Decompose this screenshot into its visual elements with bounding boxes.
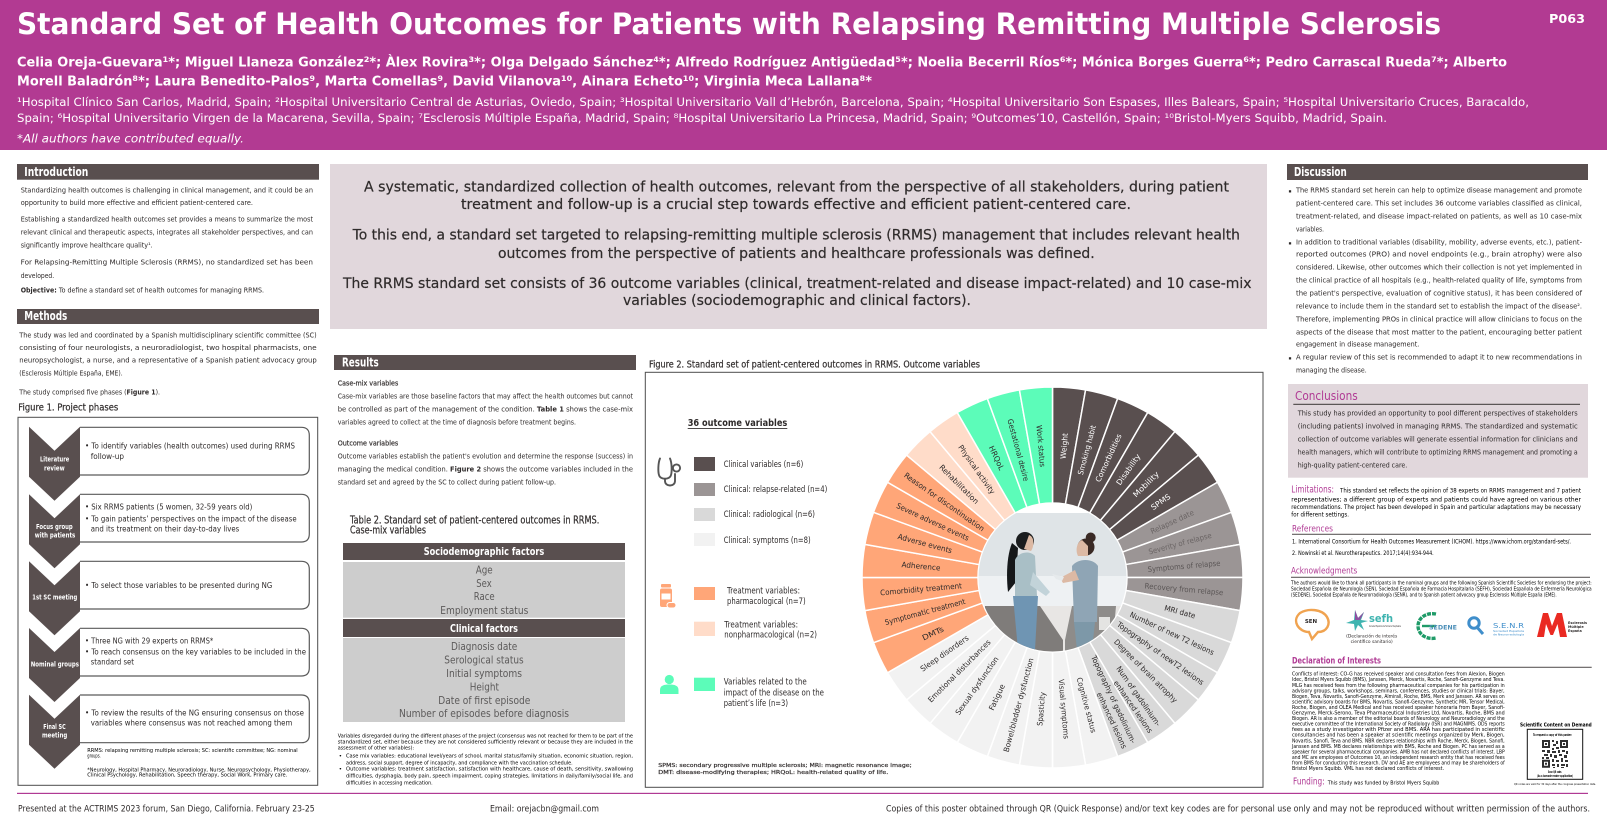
affiliations	[17, 95, 1529, 146]
wheel labels: Comorbidity treatment	[880, 581, 962, 597]
legend: clinical variables: Clinical: symptoms (n=8)	[724, 536, 811, 546]
limitations	[1291, 485, 1581, 519]
heading: methods: Methods	[24, 309, 67, 323]
wheel labels: Mobility	[1131, 469, 1161, 499]
table footnote: address, social support, degree of incapacity, and compliance with the vaccination schedule.	[346, 760, 573, 766]
phase 2: focus group: • To gain patients’ perspectives on the impact of the disease	[85, 515, 297, 524]
wheel labels: Adverse events	[897, 532, 953, 555]
discussion bullets: treatment-related, and disease impact-related on patients, as well as 10 case-mix	[1296, 212, 1583, 221]
declaration of interests: Janssen and BMS. MB declares relationships with BMS, Roche and Biogen. PC has served as a	[1291, 744, 1505, 750]
wheel labels: DMTs	[921, 625, 945, 642]
table title	[349, 515, 599, 537]
methods text: consisting of four neurologists, a neuroradiologist, two hospital pharmacists, one	[19, 343, 317, 352]
logo: SENR: S.E.N.R	[1493, 622, 1524, 630]
logo: sefh: Sociedad Española de Farmacia Hospitalaria	[1369, 624, 1401, 628]
declaration of interests: Bristol Myers Squibb. VML has not declared conflicts of interest.	[1292, 766, 1444, 772]
logo: sefh: científico sanitario)	[1351, 638, 1393, 645]
declaration of interests: Biogen. AR is also a member of the editorial boards of Neurology and Neuroradiology and the	[1292, 716, 1505, 722]
declaration of interests: Genzyme, Merck-Serono, Teva Pharmaceutical Industries Ltd, Novartis, Roche, BMS and	[1292, 710, 1505, 716]
legend: clinical variables: Clinical: radiological (n=6)	[724, 510, 815, 520]
acknowledgments	[1290, 567, 1592, 598]
declaration of interests	[1291, 656, 1592, 772]
table footnote: Variables disregarded during the different phases of the project (consensus was not reached for them to be part of the	[338, 733, 633, 739]
declaration of interests: Novartis, Sanofi, Teva and BMS. NBR declares relationships with Roche, Merck, Biogen, Sanofi,	[1292, 738, 1505, 744]
panel: methods	[17, 309, 319, 414]
wheel labels: Bowel/bladder dysfunction	[1002, 657, 1036, 753]
case-mix text	[338, 379, 634, 427]
phase 5: final SC meeting	[29, 695, 309, 769]
limitations: for different settings.	[1291, 512, 1349, 519]
declaration of interests: MLG has received fees from the following pharmaceutical companies for his participation in	[1292, 683, 1505, 689]
limitations: Limitations:	[1291, 485, 1334, 496]
funding	[1293, 776, 1440, 787]
wheel labels: Relapse date	[1149, 508, 1196, 536]
discussion bullets: In addition to traditional variables (disability, mobility, adverse events, etc.), patient-	[1296, 237, 1582, 246]
QR code panel: (As a barcode reader application)	[1537, 774, 1573, 778]
wheel labels: Symptoms of relapse	[1147, 559, 1221, 574]
figure 1 notes: *Neurology, Hospital Pharmacy, Neuroradiology, Nurse, Neuropsychology, Physiotherapy,	[87, 767, 311, 773]
heading: introduction: Introduction	[24, 165, 88, 179]
references	[1292, 525, 1591, 557]
wheel labels: Rehabilitation	[937, 463, 981, 506]
methods text: neuropsychologist, a nurse, and a representative of a Spanish patient advocacy group	[19, 356, 317, 365]
heading: results	[334, 355, 636, 370]
wheel labels: Recovery from relapse	[1144, 581, 1224, 597]
logo: SENR: Sociedad Española	[1493, 629, 1524, 633]
figure 1 notes: groups.	[87, 754, 101, 760]
table title: Table 2. Standard set of patient-centered outcomes in RRMS.	[349, 515, 599, 527]
wheel labels: Weight	[1059, 433, 1070, 459]
centre photo: two women talking	[978, 503, 1127, 652]
heading: conclusions: Conclusions	[1295, 388, 1358, 403]
phase 2: focus group	[29, 494, 309, 568]
methods text	[18, 330, 317, 396]
table footnote: Outcome variables: treatment satisfaction, satisfaction with healthcare, cause of death, sensitivity, swallowing	[346, 766, 633, 772]
wheel labels: Gestational desire	[1005, 418, 1031, 482]
table footnote: •	[339, 766, 342, 772]
heading: methods	[17, 309, 319, 324]
methods text: The study was led and coordinated by a Spanish multidisciplinary scientific committee (SC)	[18, 330, 317, 339]
logo: M Esclerosis Multiple Espana: Esclerosis	[1568, 621, 1587, 625]
wheel labels: Topography of newT2 lesions	[1115, 619, 1206, 687]
references: References	[1292, 525, 1333, 535]
figure 1 notes: RRMS: relapsing remitting multiple sclerosis; SC: scientific committee; NG: nominal	[87, 748, 298, 754]
acknowledgments: Acknowledgments	[1291, 567, 1358, 577]
discussion bullets: reported outcomes (PRO) and novel endpoints (e.g., brain atrophy) were also	[1296, 250, 1582, 259]
discussion bullets: patient-centered care. This set includes 36 outcome variables classified as clinical,	[1296, 199, 1582, 208]
poster number: P063	[1549, 12, 1585, 26]
phase 3: first SC meeting: 1st SC meeting	[32, 593, 77, 601]
panel: key message	[330, 164, 1267, 329]
wheel labels: Comorbidities	[1093, 433, 1124, 483]
table section: sociodemographic factors: Sociodemographic factors	[424, 546, 544, 558]
phase 1: literature review	[29, 427, 309, 501]
wheel labels: enhanced lesions	[1112, 679, 1155, 735]
methods text: (Esclerosis Múltiple España, EME).	[19, 368, 123, 377]
phase 4: nominal groups: standard set	[91, 658, 134, 667]
references: 2. Nowinski et al. Neurotherapeutics. 2017;14(4):934-944.	[1292, 550, 1434, 557]
sectors: relapse-related	[1116, 482, 1246, 611]
table footnote: difficulties, dysphagia, body pain, speech impairment, coping strategies, limitations in daily/family/social life, and	[346, 773, 633, 779]
declaration of interests: Conflicts of interest: CO-G has received speaker and consultation fees from Alexion, Biogen	[1292, 672, 1505, 678]
figure 1 title: Figure 1. Project phases	[18, 403, 118, 414]
table footnote: difficulties in accessing medication.	[346, 780, 433, 786]
heading: discussion: Discussion	[1294, 165, 1347, 179]
table section: sociodemographic factors: Race	[474, 591, 495, 603]
conclusions text	[1297, 409, 1578, 470]
legend: impact variables: Variables related to the	[724, 678, 807, 688]
QR code panel: Scan QR code.	[1548, 770, 1562, 774]
wheel labels: Sexual dysfunction	[954, 655, 1001, 717]
outcome variables text: standard set and agreed by the SC to collect during patient follow-up.	[338, 478, 556, 487]
panel: key message: To this end, a standard set targeted to relapsing-remitting multiple sclerosis (RRMS) management that includes relevant health	[352, 228, 1240, 244]
panel: key message: variables (sociodemographic and clinical factors).	[623, 293, 971, 309]
phase 2: focus group: Focus group	[36, 523, 73, 531]
methods text: The study comprised five phases (Figure 1).	[18, 387, 160, 396]
discussion bullets: the patient's perspective, evaluation of cognitive status), it has been considered of	[1296, 289, 1582, 298]
legend: treatment variables: nonpharmacological (n=2)	[724, 631, 817, 641]
panel: key message: A systematic, standardized collection of health outcomes, relevant from the perspective of all stakeholders, during patient	[364, 180, 1229, 196]
phase 2: focus group: with patients	[35, 531, 75, 539]
legend: clinical variables	[694, 457, 827, 546]
legend: impact variables	[694, 678, 824, 709]
phase 2: focus group: and its treatment on their day-to-day lives	[91, 524, 239, 533]
phase 1: literature review: Literature	[40, 456, 70, 464]
sectors: nonpharmacological	[907, 410, 1031, 530]
outcome variables text: managing the medical condition. Figure 2 shows the outcome variables included in the	[338, 465, 634, 474]
legend: treatment variables: pharmacological (n=7)	[727, 597, 806, 607]
phase 5: final SC meeting: variables where consensus was not reached among them	[91, 719, 292, 728]
limitations: representatives; a different group of experts and patients could have agreed on various other	[1291, 497, 1581, 504]
heading: discussion	[1287, 164, 1588, 180]
footer: Email: orejacbn@gmail.com	[490, 804, 599, 814]
discussion bullets: managing the disease.	[1296, 366, 1367, 375]
figure 2 abbreviations: DMT: disease-modifying therapies; HRQoL: health-related quality of life.	[658, 770, 889, 776]
panel: results	[334, 355, 636, 487]
wheel labels: Topography of gadolinium-	[1089, 653, 1138, 745]
introduction text: Establishing a standardized health outcomes set provides a means to summarize the most	[21, 215, 313, 224]
wheel labels: enhanced lesions	[1095, 691, 1129, 750]
footer	[17, 793, 1590, 814]
wheel labels: Visual symptoms	[1057, 679, 1071, 739]
legend: treatment variables: Treatment variables:	[723, 621, 798, 631]
declaration of interests: from BMS for conducting this research. DV and AE are employees and may be shareholders of	[1292, 760, 1505, 766]
declaration of interests: Idec, Bristol Myers Squibb (BMS), Janssen, Merck, Novartis, Roche, Sanofi-Genzyme and Teva.	[1292, 677, 1505, 683]
table footnote: •	[339, 753, 342, 759]
header banner	[0, 0, 1607, 150]
logo: sefh: sefh	[1369, 612, 1393, 625]
logo: SEDENE: SEDENE	[1429, 624, 1457, 632]
phase 4: nominal groups	[29, 628, 309, 702]
logo: SENR	[1469, 618, 1524, 636]
figure 1 notes	[87, 748, 311, 778]
authors: Morell Baladrón⁸*; Laura Benedito-Palos⁹, Marta Comellas⁹, David Vilanova¹⁰, Ainara Echeto¹⁰; Virginia Meca Lallana⁸*	[17, 74, 872, 90]
phase 4: nominal groups: Nominal groups	[31, 660, 79, 668]
logo: M Esclerosis Multiple Espana	[1537, 613, 1587, 637]
declaration of interests: consultancies and has been a speaker at scientific meetings organized by Merk, Biogen,	[1292, 733, 1505, 739]
logo: sefh	[1346, 610, 1401, 645]
logo: sefh: (Declaración de interés	[1346, 632, 1398, 639]
case-mix text: Case-mix variables	[338, 379, 399, 388]
wheel labels: Severe adverse events	[895, 501, 970, 543]
table section: sociodemographic factors: Sex	[476, 578, 492, 590]
table footnote: standardized set, either because they are not considered sufficiently relevant or because they are included in the	[338, 740, 634, 746]
table section: clinical factors: Number of episodes before diagnosis	[399, 708, 569, 720]
introduction text	[21, 185, 313, 295]
case-mix text: variables agreed to collect at the time of diagnosis before treatment begins.	[338, 418, 576, 427]
sectors: radiological	[1061, 590, 1240, 759]
wheel labels: Num of gadolinium-	[1114, 665, 1163, 728]
wheel labels: Smoking habit	[1076, 424, 1098, 476]
wheel labels: Sleep disorders	[919, 633, 970, 673]
discussion bullets: A regular review of this set is recommended to adapt it to new recommendations in	[1296, 353, 1582, 362]
table footnote: assessment of other variables):	[338, 746, 414, 752]
wheel labels: Spasticity	[1035, 691, 1047, 726]
wheel labels: Degree of brain atrophy	[1112, 637, 1180, 705]
figure 2 abbreviations	[658, 763, 912, 776]
declaration of interests: scientific advisory boards for BMS, Novartis, Sanofi-Genzyme, Synthetic MR, Tensor Medical,	[1292, 699, 1505, 705]
table footnote: Case mix variables: educational level/years of school, marital status/family situation, economic situation, region,	[346, 753, 633, 759]
panel: discussion	[1287, 164, 1588, 375]
phase 5: final SC meeting: Final SC	[43, 723, 66, 731]
affiliations: *All authors have contributed equally.	[17, 132, 244, 146]
wheel labels: Number of new T2 lesions	[1128, 610, 1216, 657]
declaration of interests: and MC are employees of Outcomes 10, an independent research entity that has received fees	[1292, 755, 1505, 761]
phase 1: literature review: review	[44, 464, 65, 472]
table section: clinical factors: Initial symptoms	[446, 668, 522, 680]
logo: M Esclerosis Multiple Espana: Múltiple	[1568, 625, 1584, 629]
phase 3: first SC meeting: • To select those variables to be presented during NG	[85, 581, 272, 590]
outcome variables text: Outcome variables	[338, 439, 399, 448]
legend: impact variables: impact of the disease on the	[724, 689, 824, 699]
authors: Celia Oreja-Guevara¹*; Miguel Llaneza González²*; Àlex Rovira³*; Olga Delgado Sánchez⁴*; Alfredo Rodríguez Antigüedad⁵*; Noelia Becerril Ríos⁶*; Mónica Borges Guerra⁶*; Pedro Carrascal Rueda⁷*; Alberto	[17, 54, 1507, 70]
conclusions text: collection of outcome variables will generate essential information for clinicians and	[1298, 435, 1578, 444]
phase 5: final SC meeting: meeting	[42, 731, 67, 739]
introduction text: For Relapsing-Remitting Multiple Sclerosis (RRMS), no standardized set has been	[21, 258, 313, 267]
case-mix text: Case-mix variables are those baseline factors that may affect the health outcomes but cannot	[338, 392, 633, 401]
phase 1: literature review: follow-up	[91, 452, 124, 461]
phase 2: focus group: • Six RRMS patients (5 women, 32-59 years old)	[85, 502, 252, 511]
logo: SEN	[1296, 610, 1329, 639]
table section: clinical factors: Date of first episode	[438, 695, 530, 707]
case-mix text: be controlled as part of the management of the condition. Table 1 shows the case-mix	[338, 405, 634, 414]
table section: clinical factors: Height	[470, 681, 499, 693]
declaration of interests: Biogen, Teva, Novartis, Sanofi-Genzyme, Almirall, Roche, BMS, Merk and Janssen. AR serves on	[1292, 694, 1505, 700]
phase 5: final SC meeting: • To review the results of the NG ensuring consensus on those	[85, 709, 304, 718]
wheel labels: Severity of relapse	[1148, 531, 1213, 556]
introduction text: developed.	[21, 271, 54, 280]
conclusions text: (including patients) involved in managing RRMS. The standardized and systematic	[1298, 422, 1578, 431]
table title: Case-mix variables	[350, 525, 426, 537]
introduction text: Objective: To define a standard set of health outcomes for managing RRMS.	[21, 286, 264, 295]
figure 2 abbreviations: SPMS: secondary progressive multiple sclerosis; MRI: magnetic resonance image;	[658, 763, 912, 769]
figure 2: outcome variables	[645, 372, 1263, 787]
logo: M Esclerosis Multiple Espana: España	[1568, 629, 1582, 633]
affiliations: Spain; ⁶Hospital Universitario Virgen de la Macarena, Sevilla, Spain; ⁷Esclerosis Múltiple España, Madrid, Spain; ⁸Hospital Universitario La Princesa, Madrid, Spain; ⁹Outcomes’10, Castellón, Spain; ¹⁰Bristol-Myers Squibb, Madrid, Spain.	[17, 111, 1387, 125]
phase 1: literature review: • To identify variables (health outcomes) used during RRMS	[85, 442, 295, 451]
figure 2 title: Figure 2. Standard set of patient-centered outcomes in RRMS. Outcome variables	[649, 360, 980, 371]
conclusions text: high-quality patient-centered care.	[1298, 461, 1407, 470]
panel: key message: The RRMS standard set consists of 36 outcome variables (clinical, treatment-related and disease impact-related) and 10 case-mix	[342, 276, 1252, 292]
icon: pill bottle	[660, 584, 676, 608]
declaration of interests: speaker for several pharmaceutical companies. AMB has not declared conflicts of interest. LBP	[1292, 749, 1505, 755]
footer: Presented at the ACTRIMS 2023 forum, San Diego, California. February 23-25	[18, 804, 315, 814]
introduction text: opportunity to build more effective and efficient patient-centered care.	[21, 198, 253, 207]
logo: SENR: de Neurorradiología	[1493, 632, 1524, 636]
table 2: case-mix variables	[338, 515, 634, 786]
figure 1 notes: Clinical Psychology, Rehabilitation, Speech therapy, Social Work, Primary care.	[87, 772, 288, 778]
conclusions text: This study has provided an opportunity to pool different perspectives of stakeholders	[1297, 409, 1578, 418]
legend: treatment variables: Treatment variables:	[726, 587, 800, 597]
declaration of interests: Roche, Biogen, and OLEA Medical and has received speaker honoraria from Bayer, Sanofi-	[1292, 705, 1505, 711]
discussion bullets: variables.	[1296, 225, 1324, 234]
title: Standard Set of Health Outcomes for Patients with Relapsing Remitting Multiple Sclerosis	[17, 7, 1441, 41]
wheel labels: Fatigue	[987, 682, 1007, 712]
discussion bullets	[1288, 186, 1583, 375]
wheel labels: Disability	[1114, 452, 1143, 487]
legend heading: 36 outcome variables	[688, 418, 787, 429]
wheel labels: Adherence	[901, 560, 941, 573]
legend: impact variables: patient’s life (n=3)	[724, 699, 788, 709]
declaration of interests: fees as a study investigator with Pfizer and BMS. ARA has participated in scientific	[1292, 727, 1505, 733]
icon: stethoscope	[658, 458, 680, 486]
table footnote	[338, 733, 634, 786]
icon: QR code	[1542, 740, 1568, 768]
table section: sociodemographic factors: Age	[476, 564, 493, 576]
table section: sociodemographic factors: Employment status	[440, 605, 528, 617]
sectors: pharmacological	[859, 454, 1005, 673]
sectors: impact on life	[957, 384, 1072, 514]
wheel labels: Reason for discontinuation	[902, 471, 986, 533]
discussion bullets: Therefore, implementing PROs in clinical practice will allow clinicians to focus on the	[1295, 315, 1583, 324]
introduction text: relevant clinical and therapeutic aspects, integrates all stakeholder perspectives, and can	[21, 227, 313, 236]
outcome variables text	[338, 439, 634, 487]
declaration of interests: Declaration of Interests	[1292, 656, 1381, 666]
table section: clinical factors: Serological status	[444, 654, 524, 666]
wheel labels: Work status	[1034, 425, 1047, 467]
wheel labels: Emotional disturbances	[926, 638, 993, 704]
wheel labels: HRQoL	[987, 444, 1006, 472]
logo: SEN: SEN	[1305, 619, 1318, 625]
sectors: symptoms	[885, 599, 1118, 771]
heading: results: Results	[342, 356, 379, 370]
discussion bullets: considered. Likewise, other outcomes which their collection is not yet implemented in	[1296, 263, 1582, 272]
introduction text: significantly improve healthcare quality¹.	[21, 241, 153, 250]
discussion bullets: The RRMS standard set herein can help to optimize disease management and promote	[1295, 186, 1583, 195]
wheel labels	[880, 418, 1224, 753]
discussion bullets: engagement in disease management.	[1296, 340, 1419, 349]
logo: SEDENE	[1418, 614, 1457, 638]
funding: This study was funded by Bristol Myers Squibb	[1327, 780, 1440, 786]
affiliations: ¹Hospital Clínico San Carlos, Madrid, Spain; ²Hospital Universitario Central de Asturias, Oviedo, Spain; ³Hospital Universitario Vall d’Hebrón, Barcelona, Spain; ⁴Hospital Universitario Son Espases, Illes Balears, Spain; ⁵Hospital Universitario Cruces, Baracaldo,	[17, 95, 1529, 109]
discussion bullets: ▪	[1288, 190, 1292, 195]
wheel labels: Symptomatic treatment	[884, 597, 966, 627]
panel: introduction	[17, 164, 319, 295]
panel: conclusions	[1288, 384, 1588, 478]
discussion bullets: ▪	[1288, 241, 1292, 246]
legend: treatment variables	[694, 587, 817, 641]
introduction text: Standardizing health outcomes is challenging in clinical management, and it could be an	[21, 185, 313, 194]
table section: clinical factors	[343, 619, 625, 722]
wheel labels: Cognitive status	[1075, 676, 1098, 734]
wheel labels: Physical activity	[956, 443, 997, 496]
QR code panel	[1514, 723, 1596, 786]
declaration of interests: advisory groups, talks, workshops, seminars, conferences, studies or clinical trials: Bayer,	[1292, 688, 1505, 694]
table section: clinical factors: Diagnosis date	[451, 641, 517, 653]
discussion bullets: relevance to include them in the standard set to establish the impact of the disease².	[1296, 302, 1582, 311]
legend: clinical variables: Clinical: relapse-related (n=4)	[724, 485, 827, 495]
outcome variables text: Outcome variables establish the patient's evolution and determine the response (success) in	[338, 452, 633, 461]
panel: key message: treatment and follow-up is a crucial step towards effective and efficient patient-centered care.	[461, 197, 1131, 213]
legend: clinical variables: Clinical variables (n=6)	[724, 460, 803, 470]
sectors: clinical variables	[1052, 387, 1220, 556]
discussion bullets: the clinical practice of all hospitals (e.g., health-related quality of life, symptoms from	[1296, 276, 1582, 285]
wheel labels: MRI date	[1163, 603, 1197, 621]
declaration of interests: executive committee of the International Society of Radiology (ISR) and MAGNIMS. ODS reports	[1292, 722, 1505, 728]
table section: clinical factors: Clinical factors	[450, 623, 518, 635]
QR code panel: To request a copy of this poster:	[1533, 732, 1572, 737]
phase 4: nominal groups: • To reach consensus on the key variables to be included in the	[85, 648, 306, 657]
icon: person	[660, 675, 678, 694]
figure 1: project phases	[18, 417, 318, 785]
table section: sociodemographic factors	[343, 543, 625, 618]
discussion bullets: ▪	[1288, 357, 1292, 362]
discussion bullets: aspects of the disease that most matter to the patient, encouraging better patient	[1296, 328, 1582, 337]
phase 3: first SC meeting	[29, 561, 309, 635]
chart: radial wheel of 36 outcome variables	[859, 384, 1246, 771]
funding: Funding:	[1293, 776, 1325, 787]
authors	[17, 54, 1507, 90]
panel: key message: outcomes from the perspective of patients and healthcare professionals was defined.	[498, 246, 1095, 262]
heading: introduction	[17, 164, 319, 180]
wheel labels: SPMS	[1149, 492, 1173, 512]
phase 4: nominal groups: • Three NG with 29 experts on RRMS*	[85, 636, 213, 645]
